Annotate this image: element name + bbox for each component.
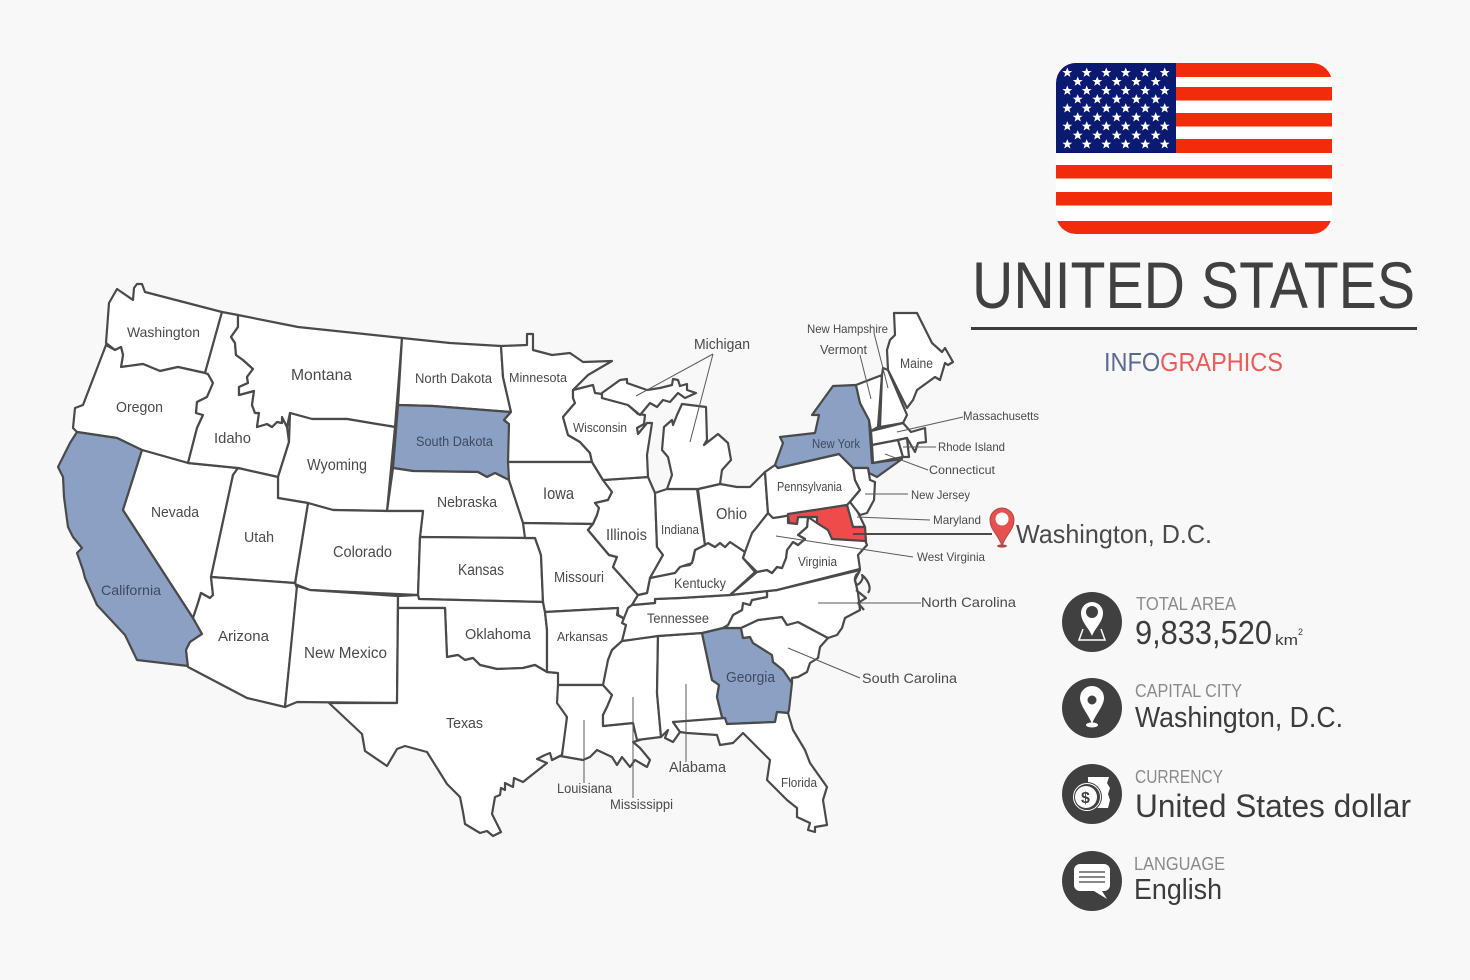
info: total area: [1062, 592, 1303, 652]
state: North Dakota: [398, 338, 511, 412]
label: Wisconsin: Wisconsin: [573, 420, 627, 435]
state: Colorado: [295, 503, 423, 595]
label: Nevada: Nevada: [151, 504, 200, 521]
state: Iowa: [508, 462, 612, 524]
label: West Virginia: West Virginia: [917, 550, 985, 564]
state: West Virginia: [743, 513, 808, 573]
label: Kansas: Kansas: [458, 562, 504, 579]
state: Oregon: [73, 345, 213, 463]
title: UNITED STATES: [972, 248, 1415, 322]
icon: red map pin: [990, 508, 1014, 548]
label: Florida: Florida: [781, 776, 817, 790]
label: Arkansas: Arkansas: [557, 629, 608, 644]
leader line: Washington D.C.: [853, 533, 992, 535]
state: Wisconsin: [563, 385, 652, 480]
label: Wyoming: Wyoming: [307, 457, 367, 474]
state: Idaho: [188, 312, 289, 477]
state: Mississippi: [603, 636, 661, 740]
info: currency: [1062, 764, 1411, 824]
state: Utah: [211, 468, 308, 583]
state: New Jersey: [850, 468, 875, 515]
state: New York: [775, 385, 902, 477]
label: New Mexico: New Mexico: [304, 645, 387, 662]
state: North Carolina: [723, 570, 860, 638]
state: New Mexico: [285, 586, 398, 707]
label: Georgia: Georgia: [726, 670, 776, 686]
state: Kansas: [418, 537, 543, 602]
state: Rhode Island: [898, 438, 909, 457]
state: Arkansas: [545, 608, 627, 685]
label: Michigan: Michigan: [694, 337, 750, 353]
label: South Carolina: South Carolina: [862, 670, 957, 686]
label: Montana: Montana: [291, 367, 352, 384]
label: capital city: CAPITAL CITY: [1135, 681, 1242, 701]
value: total area: 9,833,520: [1135, 614, 1272, 651]
label: Alabama: Alabama: [669, 760, 727, 776]
label: Iowa: Iowa: [543, 485, 575, 503]
state: Connecticut: [872, 440, 903, 463]
state: South Dakota: [393, 405, 511, 480]
map labels: [101, 322, 1039, 812]
label: Washington: Washington: [127, 324, 200, 340]
state: Washington: [106, 284, 222, 373]
state: Massachusetts: [871, 423, 926, 452]
info: language: [1062, 851, 1225, 911]
label: language: LANGUAGE: [1134, 854, 1225, 874]
icon: pin on map: [1062, 592, 1122, 652]
state: South Carolina: [741, 617, 828, 683]
icon: coins: [1062, 764, 1122, 824]
info: capital city: [1062, 678, 1343, 738]
state: Louisiana: [552, 685, 650, 767]
state: Michigan upper peninsula: [602, 379, 696, 415]
label: New Hampshire: New Hampshire: [807, 322, 888, 336]
subtitle: INFOGRAPHICS: [1104, 347, 1283, 377]
value: currency: United States dollar: [1135, 788, 1411, 824]
label: Oregon: Oregon: [116, 400, 163, 416]
state: Oklahoma: [398, 595, 547, 672]
label: Indiana: Indiana: [661, 522, 700, 537]
state: Maryland: [788, 505, 866, 541]
label: Mississippi: Mississippi: [610, 796, 673, 812]
state: Delaware: [847, 500, 865, 527]
label: currency: CURRENCY: [1135, 767, 1223, 787]
value: capital city: Washington, D.C.: [1135, 702, 1343, 734]
map of the United States: [58, 284, 953, 836]
state: Arizona: [186, 577, 297, 707]
state: Virginia: [730, 517, 867, 595]
unit: square kilometres: km: [1275, 632, 1298, 649]
label: Louisiana: Louisiana: [557, 781, 612, 796]
label: Idaho: Idaho: [214, 430, 251, 447]
state: Pennsylvania: [765, 454, 860, 518]
label: Arizona: Arizona: [218, 628, 270, 645]
label: total area: TOTAL AREA: [1136, 594, 1236, 614]
label: Ohio: Ohio: [716, 506, 747, 523]
label: California: California: [101, 582, 161, 598]
label: Virginia: Virginia: [798, 554, 838, 569]
state: Missouri: [523, 523, 638, 620]
state: Michigan lower peninsula: [662, 404, 731, 489]
label: Texas: Texas: [446, 715, 483, 732]
label: North Carolina: North Carolina: [921, 594, 1016, 610]
icon: coins: $: [1081, 790, 1090, 807]
icon: outer banks coastline: [855, 572, 870, 610]
icon: pin: [1062, 678, 1122, 738]
state: Nevada: [123, 450, 238, 618]
state: California: [58, 432, 202, 666]
label: Tennessee: Tennessee: [647, 610, 709, 626]
state: Maine: [887, 313, 953, 408]
label: Rhode Island: Rhode Island: [938, 440, 1005, 454]
value: language: English: [1134, 874, 1222, 906]
label: New York: New York: [812, 437, 861, 451]
leader lines: [584, 333, 963, 798]
label: capital on map: Washington, D.C.: [1016, 519, 1212, 549]
state: Vermont: [856, 375, 882, 431]
label: Kentucky: Kentucky: [674, 576, 726, 591]
state: Texas: [329, 608, 567, 836]
label: Connecticut: Connecticut: [929, 463, 996, 477]
state: Nebraska: [387, 468, 527, 538]
state: Kentucky: [632, 542, 755, 605]
label: South Dakota: South Dakota: [416, 434, 493, 449]
label: Colorado: Colorado: [333, 544, 392, 561]
state: New Hampshire: [880, 368, 907, 427]
label: Utah: Utah: [244, 529, 274, 546]
state: Georgia: [702, 628, 792, 724]
label: Missouri: Missouri: [554, 570, 604, 586]
label: Minnesota: Minnesota: [509, 370, 568, 385]
state: Florida: [673, 712, 827, 832]
label: Vermont: Vermont: [820, 343, 868, 357]
label: Maryland: Maryland: [933, 513, 981, 527]
label: Illinois: Illinois: [606, 527, 647, 544]
label: Massachusetts: Massachusetts: [963, 409, 1039, 423]
label: New Jersey: New Jersey: [911, 488, 970, 502]
state: Ohio: [698, 472, 768, 552]
state: Minnesota: [501, 334, 612, 462]
state: Alabama: [657, 633, 727, 742]
state: Illinois: [588, 477, 663, 595]
label: Maine: Maine: [900, 356, 933, 371]
state: Indiana: [650, 489, 705, 578]
flag: United States: [1056, 63, 1332, 234]
label: Pennsylvania: Pennsylvania: [777, 480, 842, 494]
label: North Dakota: North Dakota: [415, 371, 492, 386]
title rule: [971, 327, 1417, 330]
state: Tennessee: [622, 590, 777, 641]
label: Nebraska: Nebraska: [437, 494, 498, 511]
icon: speech bubble: [1062, 851, 1122, 911]
label: Oklahoma: Oklahoma: [465, 626, 532, 643]
unit superscript: 2: [1298, 627, 1303, 637]
state: Wyoming: [278, 413, 395, 511]
state: Montana: [231, 315, 402, 427]
